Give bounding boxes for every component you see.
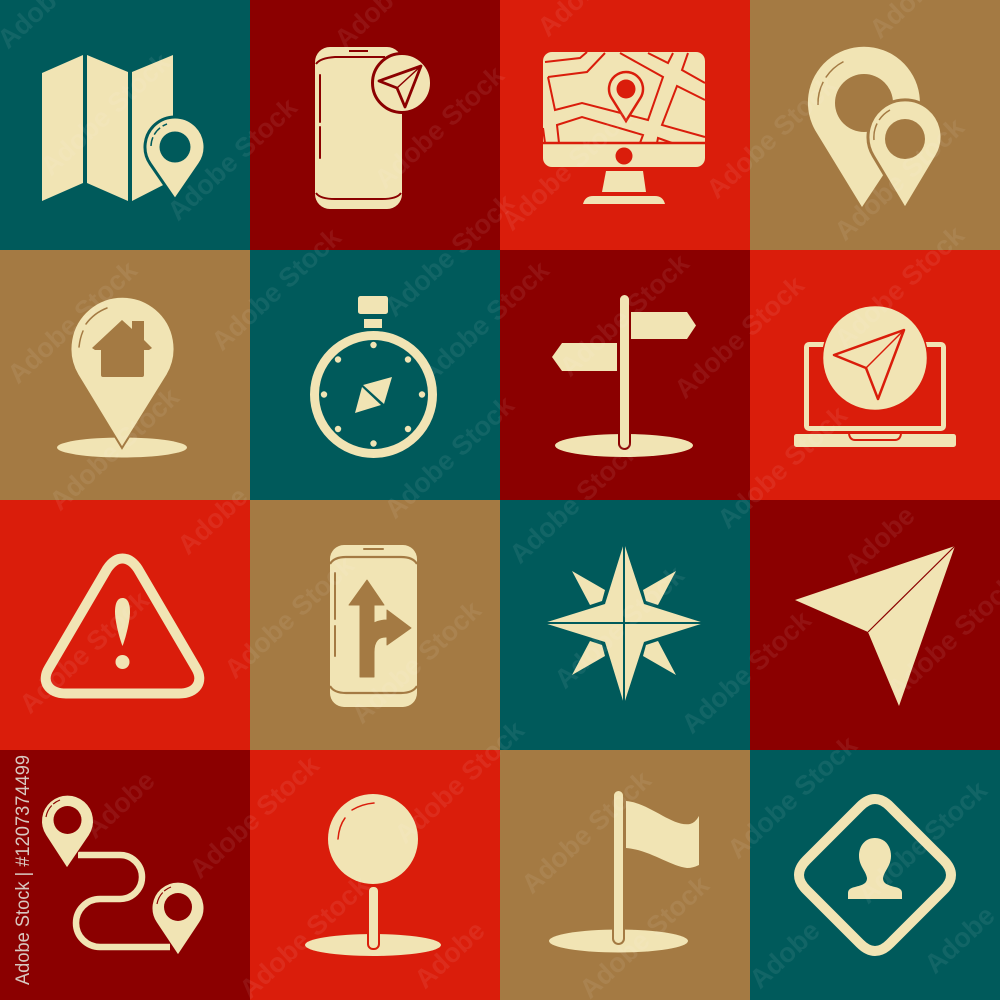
watermarks: Adobe Stock	[722, 729, 863, 864]
icon: monitor screen	[543, 52, 705, 167]
star centre lines	[542, 540, 706, 706]
panel: warning triangle	[0, 500, 250, 750]
watermarks: Adobe Stock	[701, 69, 842, 204]
watermarks: Adobe Stock	[369, 59, 510, 194]
panel: home location pin	[0, 250, 250, 500]
icon: ground ellipse	[555, 434, 693, 457]
icon: smartphone	[315, 47, 402, 209]
icon: diagonal points	[572, 571, 676, 675]
watermarks: Adobe Stock	[852, 774, 993, 909]
icon: person	[848, 838, 902, 899]
icon: compass crown	[358, 296, 388, 328]
watermarks: Adobe Stock	[184, 749, 325, 884]
icon: right sign	[631, 312, 696, 339]
watermarks: Adobe Stock	[504, 434, 645, 569]
watermarks: Adobe Stock	[14, 584, 155, 719]
icon: winding route	[76, 855, 170, 947]
icon: small pin	[868, 100, 942, 209]
watermarks: Adobe Stock	[554, 247, 695, 382]
watermarks: Adobe	[79, 765, 161, 844]
icon: map pin on screen	[609, 72, 643, 121]
watermarks: Adobe Stock	[669, 269, 810, 404]
icon: folded map	[42, 55, 173, 201]
icon: navigation badge	[822, 306, 928, 410]
panel: push pin	[250, 750, 500, 1000]
icon: main star	[544, 543, 704, 704]
icon: start pin	[42, 795, 93, 868]
monitor bezel and stand	[543, 143, 705, 204]
watermarks: Adobe Stock	[2, 254, 143, 389]
icon: junction arrows	[349, 580, 411, 677]
watermarks: Adobe Stock	[414, 254, 555, 389]
icon: ground ellipse	[57, 438, 187, 458]
panel: desktop monitor with map	[500, 0, 750, 250]
watermarks: Adobe Stock	[379, 187, 520, 322]
panel: smartphone with road arrows	[250, 500, 500, 750]
watermarks: Adobe Stock	[219, 549, 360, 684]
icon: home pin	[70, 297, 174, 448]
watermarks: Adobe Stock	[712, 399, 853, 534]
icon: navigation arrow badge	[372, 54, 432, 112]
watermarks: Adobe Stock	[379, 389, 520, 524]
watermarks: Adobe Stock	[389, 714, 530, 849]
watermarks: Adobe	[409, 915, 491, 994]
watermarks: Adobe	[839, 500, 921, 579]
map street lines	[543, 52, 705, 143]
icon: compass dial	[314, 336, 432, 454]
compass ticks	[321, 342, 425, 447]
panel: compass rose	[500, 500, 750, 750]
icon: pin head	[328, 794, 418, 884]
watermarks: Adobe Stock	[206, 221, 347, 356]
watermarks: Adobe	[919, 900, 1000, 979]
panel: folded map with pin	[0, 0, 250, 250]
icon: paper arrow	[795, 546, 955, 706]
watermarks: Adobe Stock	[162, 91, 303, 226]
watermarks: Adobe	[172, 481, 254, 560]
icon: ground ellipse	[305, 934, 441, 956]
panel: smartphone with navigation arrow	[250, 0, 500, 250]
icon: exclamation mark	[115, 598, 130, 669]
arrow fold line	[868, 546, 955, 632]
panel: navigation arrow	[750, 500, 1000, 750]
panel: flag	[500, 750, 750, 1000]
icon: smartphone	[330, 545, 417, 707]
watermarks: Adobe Stock	[496, 101, 637, 236]
icon: pin shaft	[368, 886, 379, 949]
icon: diamond sign	[799, 799, 951, 951]
icon: large pin	[808, 47, 920, 207]
panel: diamond road sign with person	[750, 750, 1000, 1000]
icon: end pin	[152, 882, 204, 955]
panel: signpost	[500, 250, 750, 500]
panel: two location pins	[750, 0, 1000, 250]
watermarks: Adobe Stock	[346, 594, 487, 729]
panel: laptop with navigation arrow	[750, 250, 1000, 500]
icon: triangle outline	[46, 558, 199, 694]
icon: ground ellipse	[549, 930, 688, 952]
icon: location pin	[145, 117, 205, 200]
watermarks: Adobe Stock	[829, 219, 970, 354]
watermarks: Adobe	[744, 915, 826, 994]
watermarks: Adobe Stock	[676, 604, 817, 739]
icon: signpost pole	[619, 294, 630, 449]
icon: waving flag	[626, 801, 699, 868]
icon: laptop	[794, 344, 956, 447]
watermarks: Adobe Stock	[44, 381, 185, 516]
panel: stopwatch compass	[250, 250, 500, 500]
watermarks: Adobe Stock	[35, 46, 176, 181]
watermarks: Adobe Stock	[516, 764, 657, 899]
panel: route between two pins	[0, 750, 250, 1000]
watermarks: Adobe Stock	[549, 559, 690, 694]
icon: left sign	[552, 343, 617, 371]
watermarks: Adobe Stock	[829, 111, 970, 246]
icon: compass needle	[355, 377, 392, 413]
stock attribution text: Adobe Stock | #1207374499	[13, 755, 34, 985]
icon: flag pole	[613, 790, 624, 944]
